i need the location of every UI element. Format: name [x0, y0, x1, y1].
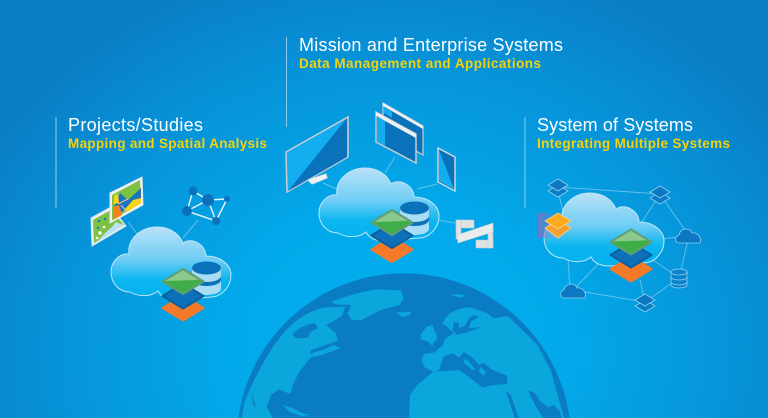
Italy: [463, 358, 476, 370]
subheading: Integrating Multiple Systems: [537, 136, 730, 151]
Greece: [479, 367, 486, 376]
icon: small cloud lower left: [561, 284, 585, 298]
Mediterranean: [433, 352, 507, 387]
Baja: [252, 392, 257, 409]
icon: layer stack: [162, 269, 204, 320]
icon: small stack bottom: [635, 294, 655, 312]
icon: small cloud right: [676, 229, 700, 243]
subheading: Data Management and Applications: [299, 56, 541, 71]
connector lines: [128, 220, 198, 238]
Cuba: [283, 405, 311, 416]
panel: system of systems: [525, 115, 730, 312]
network lines: [558, 187, 689, 302]
icon: database: [192, 262, 221, 295]
Iceland: [397, 312, 411, 317]
globe: [238, 273, 570, 418]
heading: System of Systems: [537, 115, 693, 135]
Arabian Sea: [528, 391, 561, 418]
icon: orange layers: [545, 213, 571, 238]
divider line: [286, 37, 288, 127]
icon: integration links: [456, 220, 493, 248]
Greenland: [331, 289, 404, 321]
Eurasia and Africa: [409, 307, 564, 418]
Hudson Bay: [293, 323, 318, 338]
icon: layer stack: [610, 230, 652, 282]
icon: database: [400, 202, 429, 235]
North Sea: [432, 323, 454, 349]
North America: [239, 307, 345, 418]
icon: network: [182, 186, 230, 225]
heading: Projects/Studies: [68, 115, 203, 135]
Red Sea: [506, 390, 519, 418]
icon: small stack top left: [548, 179, 568, 197]
Svalbard: [451, 294, 467, 298]
icon: small stack top right: [650, 186, 670, 204]
icon: tablet: [438, 148, 455, 191]
divider line: [55, 117, 57, 208]
divider line: [524, 117, 526, 208]
panel: mission and enterprise systems: [286, 35, 563, 262]
Baltic: [452, 315, 482, 335]
highlight square: [538, 213, 558, 238]
icon: cloud: [544, 193, 664, 266]
subheading: Mapping and Spatial Analysis: [68, 136, 267, 151]
panel: projects/studies: [56, 115, 267, 320]
icon: app windows: [376, 103, 423, 163]
icon: cloud: [319, 168, 439, 241]
icon: cloud: [111, 227, 231, 300]
icon: small database: [671, 269, 687, 288]
icon: layer stack: [372, 210, 412, 262]
connector lines: [323, 157, 455, 223]
icon: maps: [91, 177, 143, 246]
heading: Mission and Enterprise Systems: [299, 35, 563, 55]
icon: monitor: [286, 117, 348, 192]
